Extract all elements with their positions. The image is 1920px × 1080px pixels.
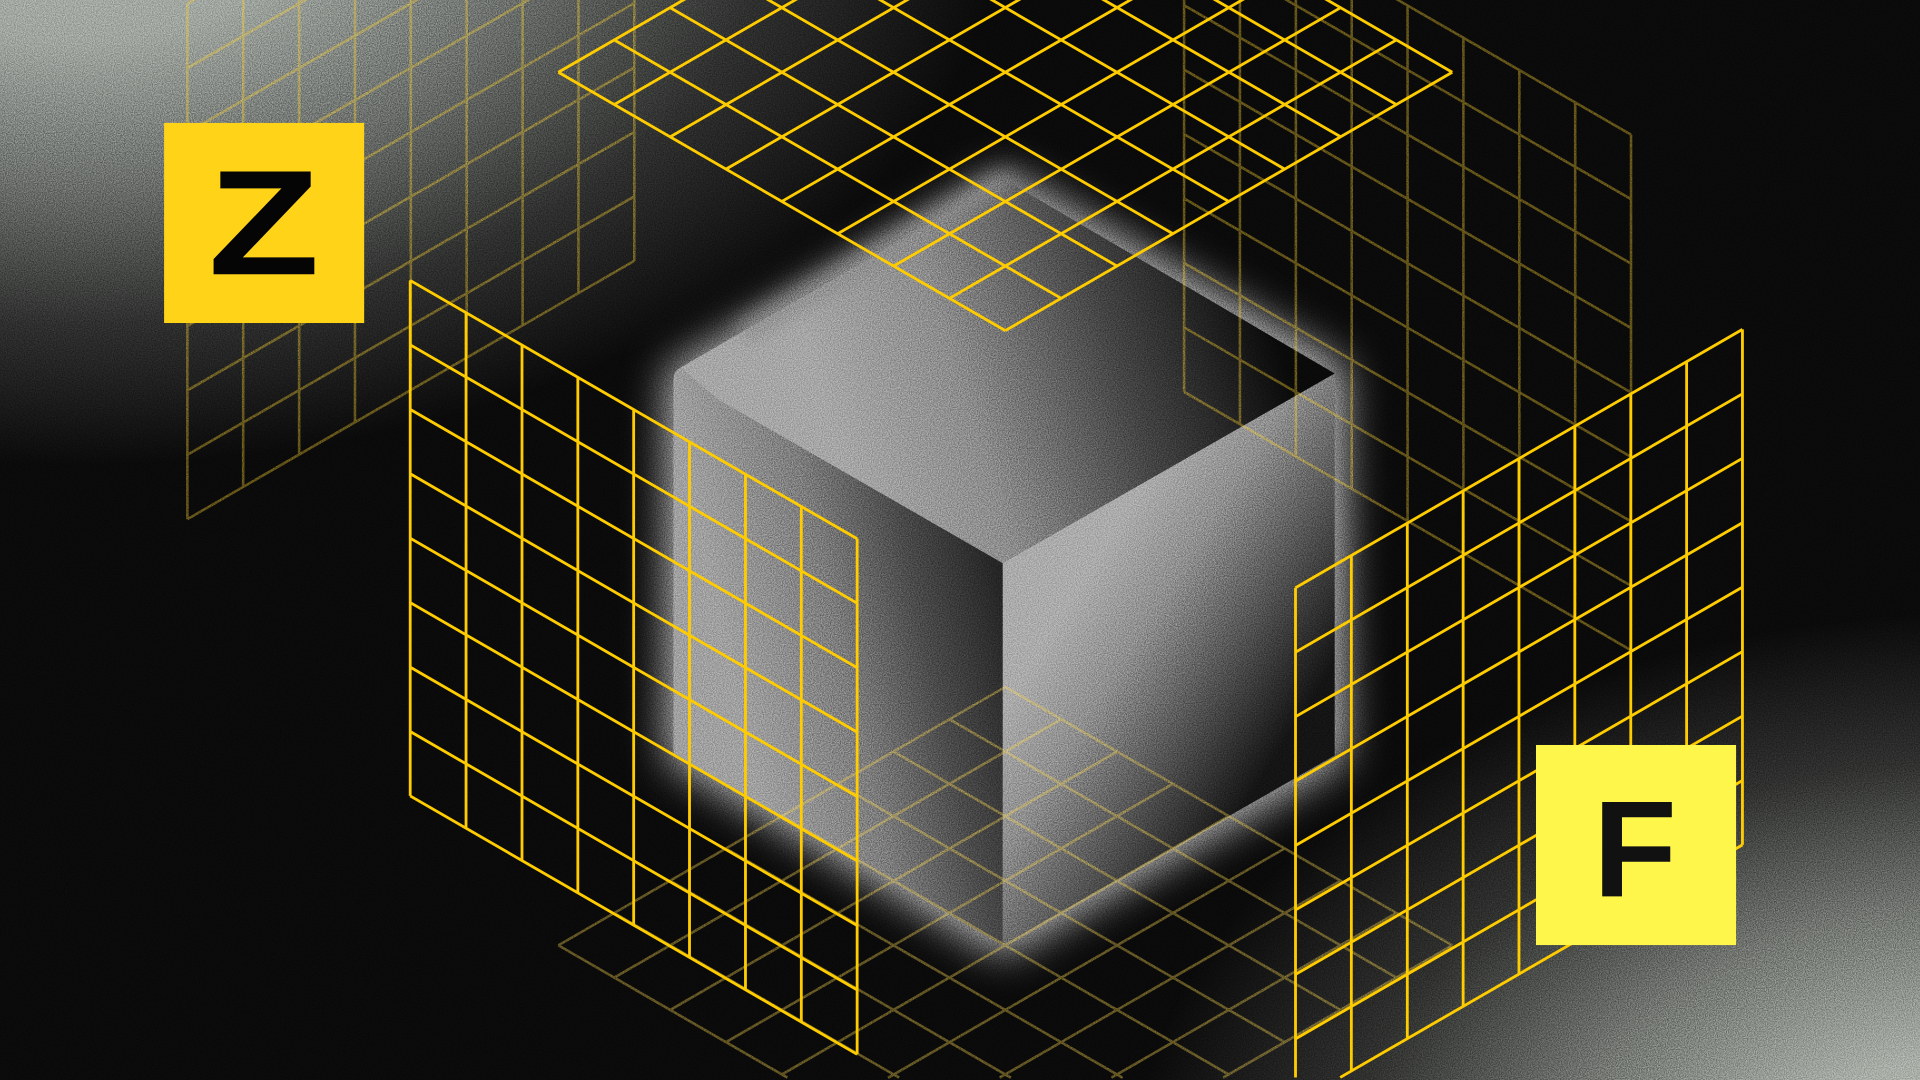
cube: right face <box>1003 373 1335 945</box>
back grid: upper right <box>1184 0 1631 650</box>
left grid <box>410 280 857 1054</box>
badge: Z <box>164 123 364 323</box>
cube glow <box>667 173 1344 955</box>
back grid: upper left <box>187 0 634 519</box>
top grid <box>558 0 1452 331</box>
floor grid <box>558 687 1452 1078</box>
badge: Z: Z <box>208 139 320 306</box>
right grid <box>1296 329 1742 1078</box>
cube: soft upper edge <box>747 181 1005 331</box>
badge: F <box>1536 745 1736 945</box>
cube: top face <box>681 180 1335 563</box>
badge: F: F <box>1593 773 1677 926</box>
cube <box>673 180 1335 945</box>
cube: left face <box>673 367 1003 945</box>
